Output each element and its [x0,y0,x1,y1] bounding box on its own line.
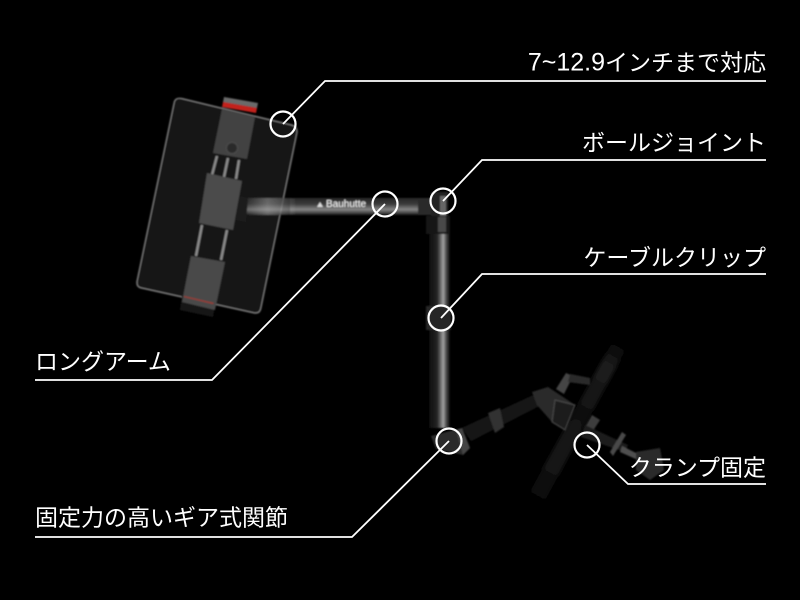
top clamp [213,97,258,159]
pole mount joint [532,373,590,430]
callout: gear joint: 固定力の高いギア式関節 [35,504,288,530]
callout: gear joint [35,428,462,537]
callout: clamp [574,432,766,484]
tablet [137,97,297,317]
bottom clamp [180,256,225,317]
long horizontal arm [290,198,432,215]
callout: cable clip [428,244,766,330]
support pole [522,341,628,510]
callout: ball joint: ボールジョイント [582,130,766,156]
callout: long arm: ロングアーム [35,348,171,374]
callout: tablet size [270,48,766,136]
gear joint [431,428,470,455]
brand logo: Bauhutte [326,199,366,210]
callout: ball joint [430,130,766,214]
ball joint [426,192,450,234]
product: mount arm [137,97,664,480]
lower arm [462,393,541,441]
callout: clamp: クランプ固定 [629,454,766,480]
arm seen through tablet [245,198,295,215]
slider rods [196,156,239,260]
cable clip [426,306,451,330]
arm mount [236,196,248,222]
callout: cable clip: ケーブルクリップ [583,244,766,270]
clamp [581,415,664,480]
vertical arm [429,234,450,428]
callout: tablet size: 7~12.9インチまで対応 [528,48,766,76]
callout: long arm [35,192,398,380]
centre block [199,173,242,230]
